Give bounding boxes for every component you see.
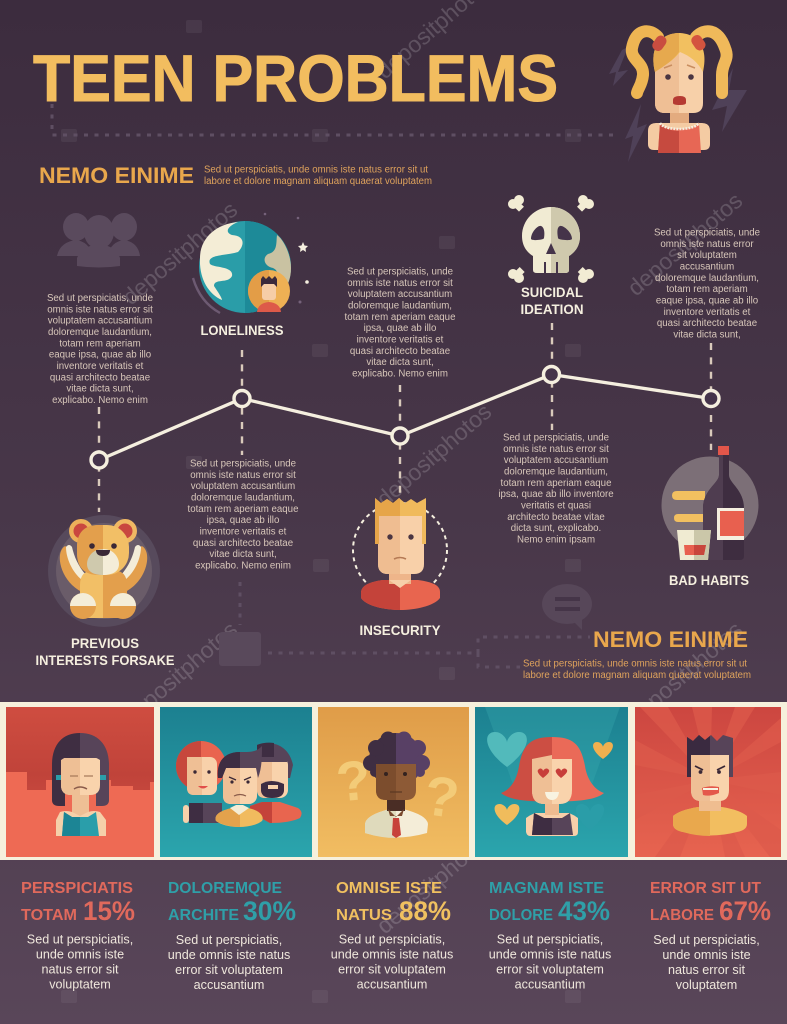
stat: magnam iste 43%: MAGNAM ISTE <box>489 880 604 897</box>
text block: column four: unde omnis iste natus <box>489 948 611 962</box>
text block: top intro: labore et dolore magnam aliquam quaerat voluptatem <box>204 176 432 187</box>
text block: bottom intro: Sed ut perspiciatis, unde omnis iste natus error sit ut <box>523 658 747 670</box>
stat: error sit ut 67%: 67% <box>719 896 771 926</box>
text block: second paragraph: inventore veritatis et <box>200 526 287 538</box>
text block: column three: accusantium <box>357 978 427 992</box>
text block: second paragraph: omnis iste natus error sit <box>190 470 296 481</box>
text block: third paragraph: voluptatem accusantium <box>348 289 452 300</box>
text block: third paragraph: inventore veritatis et <box>357 334 444 346</box>
text block: fifth paragraph: eaque ipsa, quae ab illo <box>656 296 758 306</box>
decorative watermarks: depositphotos <box>622 187 747 301</box>
decorative watermarks: depositphotos <box>117 196 242 310</box>
text block: column five: unde omnis iste <box>662 948 751 962</box>
text block: column two: Sed ut perspiciatis, <box>176 933 282 947</box>
text block: fifth paragraph: vitae dicta sunt, <box>673 330 741 340</box>
text block: column five: Sed ut perspiciatis, <box>653 933 760 947</box>
text block: third paragraph: vitae dicta sunt, <box>366 357 434 368</box>
line chart with dashed connectors <box>91 323 719 512</box>
text block: fifth paragraph: doloremque laudantium, <box>655 273 759 284</box>
stat: perspiciatis 15%: 15% <box>83 896 135 926</box>
text block: column one: Sed ut perspiciatis, <box>27 932 133 946</box>
label: bad habits: BAD HABITS <box>669 572 749 588</box>
text block: fourth paragraph: omnis iste natus error sit <box>503 444 609 455</box>
panel: group of three <box>160 707 312 857</box>
panel: confused man with question marks <box>318 707 469 857</box>
stat: magnam iste 43%: DOLORE <box>489 907 553 924</box>
text block: fifth paragraph: inventore veritatis et <box>664 307 751 318</box>
text block: third paragraph: Sed ut perspiciatis, unde <box>347 266 453 278</box>
text block: third paragraph: totam rem aperiam eaque <box>345 312 455 323</box>
stat: omnise iste 88%: OMNISE ISTE <box>336 880 442 897</box>
decorative watermarks: depositphotos <box>371 398 496 512</box>
text block: column three: error sit voluptatem <box>338 962 446 976</box>
stat: doloremque 30%: 30% <box>243 896 296 926</box>
text block: second paragraph: doloremque laudantium, <box>191 492 295 504</box>
text block: second paragraph: Sed ut perspiciatis, unde <box>190 458 296 470</box>
text block: fifth paragraph: Sed ut perspiciatis, unde <box>654 228 760 238</box>
text block: left paragraph: doloremque laudantium, <box>48 327 152 338</box>
text block: left paragraph: vitae dicta sunt, <box>66 384 134 395</box>
stat: doloremque 30%: DOLOREMQUE <box>168 880 282 897</box>
label: previous interests forsake: INTERESTS FORSAKE <box>36 652 174 668</box>
icon: teddy bear <box>48 515 160 627</box>
ghost chat bubble <box>542 584 592 630</box>
text block: left paragraph: omnis iste natus error sit <box>47 304 153 315</box>
text block: left paragraph: quasi architecto beatae <box>50 372 150 383</box>
text block: fourth paragraph: totam rem aperiam eaque <box>501 478 611 489</box>
text block: column two: unde omnis iste natus <box>168 948 290 962</box>
text block: left paragraph: inventore veritatis et <box>57 361 144 372</box>
text block: column one: unde omnis iste <box>36 948 124 962</box>
title: TEEN PROBLEMS <box>33 41 558 115</box>
icon: scared girl with pigtails <box>609 31 747 162</box>
ghost dotted connector top <box>52 104 615 135</box>
decorative watermarks: depositphotos <box>371 825 496 939</box>
text block: second paragraph: vitae dicta sunt, <box>209 549 277 560</box>
text block: column two: error sit voluptatem <box>175 963 283 977</box>
stat: perspiciatis 15%: PERSPICIATIS <box>21 880 133 897</box>
text block: third paragraph: ipsa, quae ab illo <box>364 323 436 334</box>
decorative watermarks: depositphotos <box>622 616 747 730</box>
text block: top intro: Sed ut perspiciatis, unde omnis iste natus error sit ut <box>204 164 428 176</box>
text block: fifth paragraph: omnis iste natus error <box>660 239 754 250</box>
text block: fourth paragraph: Nemo enim ipsam <box>517 534 595 546</box>
text block: left paragraph: eaque ipsa, quae ab illo <box>49 350 151 361</box>
text block: fourth paragraph: architecto beatae vitae <box>507 512 605 523</box>
panel: angry boy on sunburst <box>635 707 781 857</box>
stat: error sit ut 67% <box>650 880 771 926</box>
heading: nemo einime bottom: NEMO EINIME <box>593 627 748 652</box>
label: insecurity: INSECURITY <box>360 622 441 638</box>
text block: second paragraph: quasi architecto beatae <box>193 538 293 549</box>
decorative watermarks: depositphotos <box>117 616 242 730</box>
text block: fourth paragraph: ipsa, quae ab illo inventore <box>498 489 614 500</box>
panel: girl in love <box>475 707 628 857</box>
text block: fifth paragraph: totam rem aperiam <box>666 284 748 295</box>
label: suicidal ideation: IDEATION <box>520 301 584 317</box>
stat: perspiciatis 15% <box>21 880 135 926</box>
text block: column four: error sit voluptatem <box>496 962 604 976</box>
text block: column two: accusantium <box>194 978 264 992</box>
label: loneliness: LONELINESS <box>200 322 284 338</box>
stat: omnise iste 88% <box>336 880 451 926</box>
ghost film and dotted connector bottom <box>219 582 590 667</box>
text block: left paragraph: totam rem aperiam <box>59 338 141 349</box>
stat: error sit ut 67%: LABORE <box>650 907 714 924</box>
text block: third paragraph: quasi architecto beatae <box>350 346 450 357</box>
stat: omnise iste 88%: NATUS <box>336 907 392 924</box>
label: previous interests forsake: PREVIOUS <box>71 635 139 651</box>
stat: magnam iste 43%: 43% <box>558 896 610 926</box>
text block: bottom intro: labore et dolore magnam aliquam quaerat voluptatem <box>523 670 751 681</box>
icon: bottle and glass <box>662 446 758 560</box>
cream band behind portraits <box>0 702 787 860</box>
text block: second paragraph: explicabo. Nemo enim <box>195 560 291 572</box>
text block: left paragraph: explicabo. Nemo enim <box>52 395 148 406</box>
stat: magnam iste 43% <box>489 880 610 926</box>
text block: fourth paragraph: dicta sunt, explicabo. <box>511 523 601 534</box>
text block: third paragraph: doloremque laudantium, <box>348 300 452 312</box>
text block: column five: voluptatem <box>676 978 737 992</box>
text block: column three: unde omnis iste natus <box>331 948 453 962</box>
text block: column four: Sed ut perspiciatis, <box>497 932 603 946</box>
panel: confused man with question marks: ? <box>334 748 373 813</box>
text block: fifth paragraph: quasi architecto beatae <box>657 318 757 329</box>
icon: insecure boy with dashed circle <box>353 498 447 610</box>
text block: column four: accusantium <box>515 978 585 992</box>
icon: earth with lonely boy <box>193 213 309 313</box>
stat: omnise iste 88%: 88% <box>399 896 451 926</box>
text block: second paragraph: ipsa, quae ab illo <box>207 515 279 526</box>
text block: column one: natus error sit <box>42 962 119 976</box>
text block: second paragraph: voluptatem accusantium <box>191 481 295 492</box>
text block: third paragraph: omnis iste natus error sit <box>347 278 453 289</box>
text block: column three: Sed ut perspiciatis, <box>339 932 445 946</box>
text block: fifth paragraph: sit voluptatem <box>677 250 737 261</box>
panel: crying girl <box>6 707 154 857</box>
text block: third paragraph: explicabo. Nemo enim <box>352 368 448 380</box>
text block: left paragraph: voluptatem accusantium <box>48 316 152 327</box>
stat: perspiciatis 15%: TOTAM <box>21 907 77 924</box>
text block: second paragraph: totam rem aperiam eaque <box>188 504 298 515</box>
label: suicidal ideation: SUICIDAL <box>521 284 583 300</box>
stat: error sit ut 67%: ERROR SIT UT <box>650 880 761 897</box>
text block: fourth paragraph: veritatis et quasi <box>521 500 591 512</box>
stat: doloremque 30% <box>168 880 296 926</box>
text block: left paragraph: Sed ut perspiciatis, unde <box>47 293 153 304</box>
text block: fourth paragraph: doloremque laudantium, <box>504 466 608 478</box>
heading: nemo einime top: NEMO EINIME <box>39 163 194 188</box>
text block: fourth paragraph: voluptatem accusantium <box>504 455 608 466</box>
panel: confused man with question marks: ? <box>420 763 463 830</box>
text block: fourth paragraph: Sed ut perspiciatis, unde <box>503 432 609 444</box>
stat: doloremque 30%: ARCHITE <box>168 907 239 924</box>
icon: skull and bones <box>508 195 594 283</box>
text block: column five: natus error sit <box>668 963 745 977</box>
text block: fifth paragraph: accusantium <box>680 262 734 272</box>
text block: column one: voluptatem <box>49 978 111 992</box>
icon: ghost people <box>57 213 140 268</box>
